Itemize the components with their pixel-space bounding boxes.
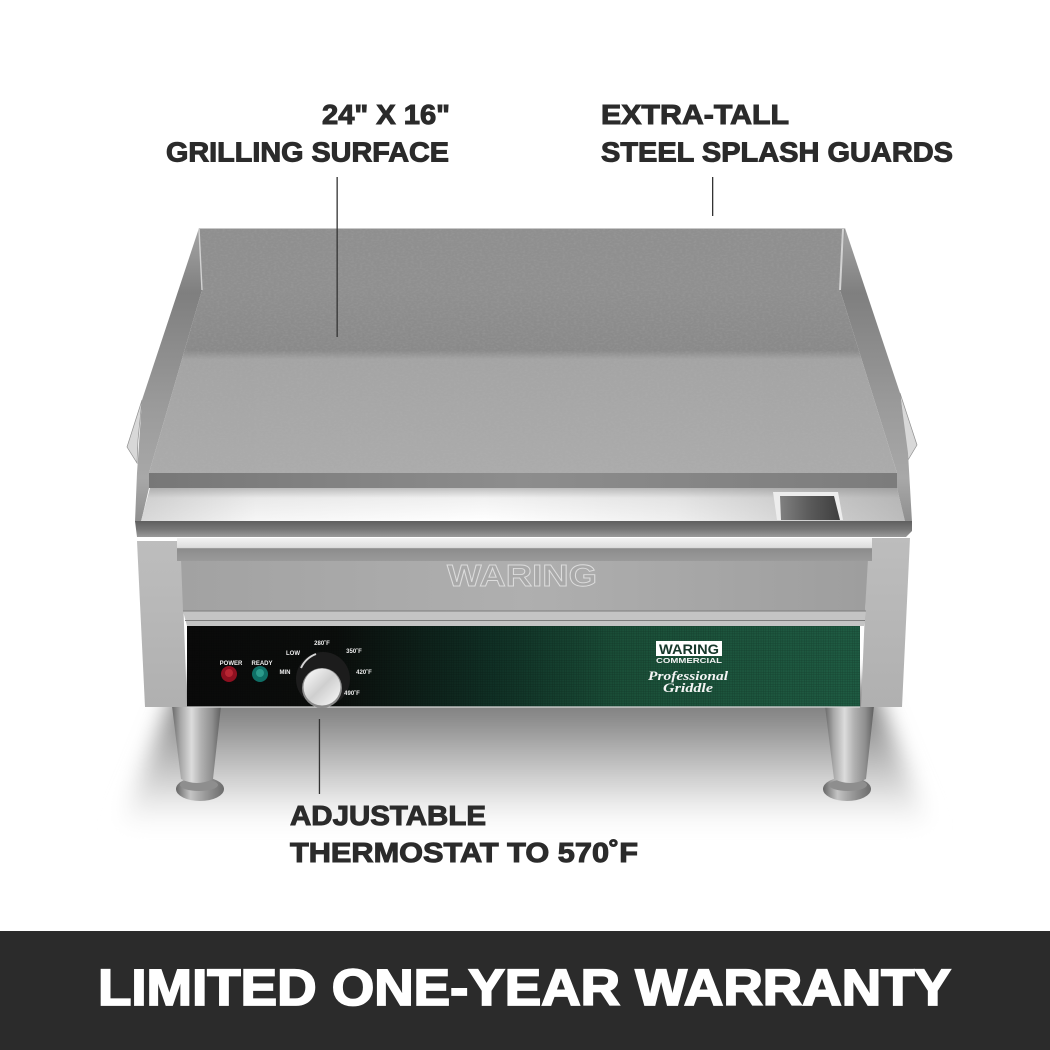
warranty banner: LIMITED ONE-YEAR WARRANTY [98, 959, 951, 1016]
callout: thermostat: ADJUSTABLE [290, 800, 486, 831]
grease drawer slot [773, 492, 843, 520]
callout: grilling surface: GRILLING SURFACE [166, 136, 449, 168]
handle bar [177, 538, 872, 561]
ready indicator [251, 661, 273, 682]
icon: right leg [823, 706, 874, 801]
icon: left leg [172, 706, 224, 801]
callout: grilling surface [166, 99, 450, 337]
thermostat scale: 420˚F [356, 669, 372, 676]
warranty banner [0, 931, 1050, 1050]
power indicator: POWER [220, 661, 243, 667]
callout: splash guards: EXTRA-TALL [601, 99, 789, 130]
callout: splash guards: STEEL SPLASH GUARDS [601, 136, 953, 168]
front lip [135, 521, 912, 537]
left body side panel [137, 541, 187, 707]
left splash guard [135, 228, 202, 522]
grease tray [141, 488, 905, 521]
plate front edge [149, 473, 897, 488]
Waring Commercial logo: WARING [659, 641, 719, 657]
steel grain [284, 262, 746, 352]
thermostat scale: 350˚F [346, 648, 362, 655]
back splash guard [199, 228, 845, 291]
thermostat scale [280, 640, 372, 697]
right handle [900, 393, 917, 460]
grilling plate [149, 290, 897, 473]
callout: thermostat [290, 719, 638, 868]
ready indicator: READY [251, 661, 273, 667]
thermostat scale: 280˚F [314, 640, 330, 647]
Waring embossed logo: WARING [447, 558, 597, 593]
Waring Commercial logo [656, 641, 723, 665]
control panel [187, 626, 860, 708]
product name [648, 668, 728, 695]
right splash guard [840, 228, 912, 522]
left handle [127, 400, 142, 463]
right body side panel [861, 538, 910, 707]
floor shadow [120, 680, 930, 828]
thermostat scale: MIN [280, 670, 290, 676]
power indicator [220, 661, 243, 682]
front fascia [181, 559, 868, 611]
product name: Professional [648, 668, 728, 683]
Waring Commercial logo: COMMERCIAL [656, 656, 723, 665]
callout: grilling surface: 24" X 16" [322, 99, 450, 130]
callout: splash guards [601, 99, 953, 216]
callout: thermostat: THERMOSTAT TO 570˚F [290, 837, 638, 868]
icon: thermostat knob [296, 652, 350, 708]
thermostat scale: 490˚F [344, 690, 360, 697]
griddle illustration [120, 228, 930, 828]
thermostat scale: LOW [286, 651, 300, 657]
trim strip [183, 611, 866, 626]
product name: Griddle [663, 680, 713, 695]
